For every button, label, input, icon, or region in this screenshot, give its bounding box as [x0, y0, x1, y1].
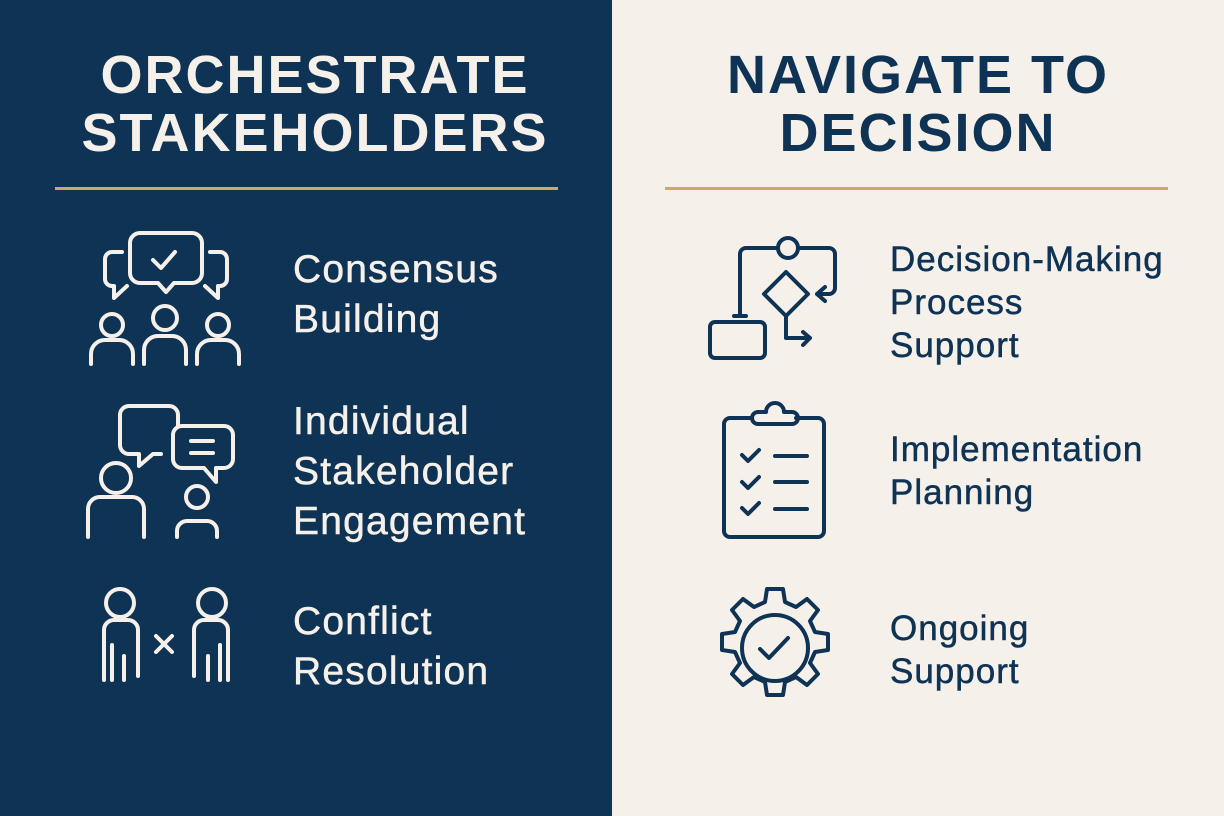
label: decision-making process support: Decision-Making [890, 240, 1164, 279]
title: navigate to decision [727, 45, 1109, 163]
label: consensus building: Consensus [293, 248, 499, 291]
label: conflict resolution [293, 600, 489, 693]
label: individual stakeholder engagement: Individual [293, 400, 470, 443]
panel: navigate to decision [612, 0, 1224, 816]
label: conflict resolution: Resolution [293, 650, 489, 693]
icon: gear with check [722, 589, 828, 695]
icon: conflict resolution [104, 589, 228, 680]
icon: individual stakeholder engagement [88, 406, 233, 537]
label: ongoing support: Support [890, 652, 1020, 691]
label: implementation planning: Planning [890, 473, 1034, 512]
label: conflict resolution: Conflict [293, 600, 433, 643]
title: orchestrate stakeholders: STAKEHOLDERS [81, 103, 549, 163]
label: individual stakeholder engagement [293, 400, 526, 543]
title: navigate to decision: DECISION [779, 103, 1057, 163]
label: individual stakeholder engagement: Engagement [293, 500, 526, 543]
label: decision-making process support: Process [890, 283, 1023, 322]
label: decision-making process support: Support [890, 326, 1020, 365]
label: consensus building: Building [293, 298, 441, 341]
label: implementation planning [890, 430, 1143, 512]
label: ongoing support: Ongoing [890, 609, 1029, 648]
icon: decision-making flowchart [710, 238, 835, 358]
title: orchestrate stakeholders [81, 45, 549, 163]
icon: clipboard checklist [724, 403, 824, 537]
panel: orchestrate stakeholders [0, 0, 612, 816]
label: individual stakeholder engagement: Stakeholder [293, 450, 514, 493]
title: orchestrate stakeholders: ORCHESTRATE [100, 45, 530, 105]
label: decision-making process support [890, 240, 1164, 365]
label: implementation planning: Implementation [890, 430, 1143, 469]
label: consensus building [293, 248, 499, 341]
icon: consensus building [91, 233, 239, 364]
label: ongoing support [890, 609, 1029, 691]
title: navigate to decision: NAVIGATE TO [727, 45, 1109, 105]
